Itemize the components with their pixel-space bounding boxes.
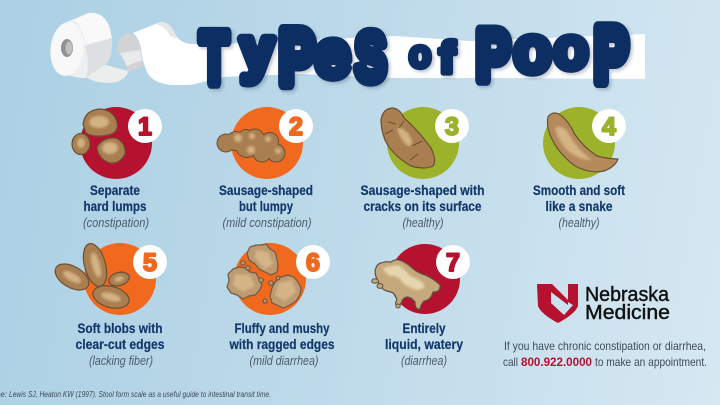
call to action text: 800.922.0000: [521, 355, 592, 369]
title: o: [514, 15, 551, 86]
title: P: [279, 15, 315, 101]
icon: toilet paper roll: [48, 13, 225, 85]
number badge 1: 1: [138, 113, 152, 141]
call to action text: call: [503, 355, 518, 369]
caption 6: (mild diarrhea): [250, 353, 318, 368]
number badge 3: 3: [445, 113, 459, 141]
caption 2: (mild constipation): [222, 215, 312, 230]
panel: type 4: [533, 107, 626, 230]
circle background 3: [387, 107, 459, 179]
caption 1: [83, 182, 149, 230]
circle background 6: [234, 243, 306, 315]
logo wordmark: Nebraska: [585, 284, 670, 306]
caption 2: but lumpy: [239, 198, 293, 214]
source footnote: Lewis SJ, Heaton KW (1997). Stool form scale as a useful guide to intestinal transit time.: [9, 390, 271, 399]
illustration: liquid splat: [372, 260, 440, 309]
caption 7: (diarrhea): [401, 353, 447, 368]
title: T: [200, 17, 228, 98]
panel: type 7: [372, 244, 470, 368]
caption 2: Sausage-shaped: [219, 182, 313, 198]
panel: type 1: [72, 107, 162, 230]
illustration: smooth snake: [547, 113, 618, 172]
caption 5: [76, 320, 165, 368]
caption 1: (constipation): [83, 215, 149, 230]
illustration: separate hard lumps: [72, 109, 125, 163]
title: S: [355, 20, 386, 96]
caption 3: [360, 182, 484, 230]
caption 1: Separate: [90, 182, 140, 198]
illustration: lumpy sausage: [216, 128, 286, 162]
panel: type 6: [227, 243, 335, 368]
illustration: cracked sausage: [381, 108, 435, 168]
circle background 2: [231, 107, 303, 179]
title: y: [241, 17, 274, 83]
panel: type 5: [51, 241, 167, 368]
number badge 6: 6: [306, 249, 320, 277]
title: o: [409, 33, 431, 75]
caption 3: Sausage-shaped with: [360, 182, 484, 198]
circle background 5: [84, 243, 156, 315]
caption 4: [533, 182, 625, 230]
title: [200, 11, 628, 101]
caption 7: Entirely: [402, 320, 446, 336]
caption 7: [385, 320, 463, 368]
caption 4: (healthy): [558, 215, 600, 230]
logo wordmark: [585, 284, 670, 324]
panel: type 2: [216, 107, 313, 230]
caption 4: Smooth and soft: [533, 182, 625, 198]
caption 3: cracks on its surface: [364, 198, 482, 214]
number badge 4: 4: [602, 113, 616, 141]
icon: N shield: [537, 284, 578, 323]
caption 7: liquid, watery: [385, 336, 463, 352]
circle background 4: [543, 107, 615, 179]
caption 2: [219, 182, 313, 230]
title: P: [594, 11, 628, 98]
logo: Nebraska Medicine: [537, 284, 670, 324]
title: e: [314, 17, 350, 91]
logo wordmark: Medicine: [585, 302, 670, 324]
caption 1: hard lumps: [84, 198, 147, 214]
title: o: [554, 17, 588, 82]
caption 3: (healthy): [402, 215, 444, 230]
panel: type 3: [360, 107, 484, 230]
number badge 2: 2: [289, 113, 303, 141]
call to action text: [503, 339, 707, 369]
title: f: [439, 33, 456, 83]
paper strip behind title: [220, 34, 645, 79]
illustration: fluffy ragged pieces: [227, 244, 301, 308]
illustration: soft blobs: [51, 241, 132, 312]
circle background 1: [80, 107, 152, 179]
caption 5: clear-cut edges: [76, 336, 165, 352]
circle background 7: [390, 244, 460, 314]
caption 5: (lacking fiber): [89, 353, 153, 368]
number badge 5: 5: [143, 249, 157, 277]
caption 6: with ragged edges: [229, 336, 335, 352]
caption 6: Fluffy and mushy: [234, 320, 330, 336]
caption 5: Soft blobs with: [78, 320, 162, 336]
number badge 7: 7: [446, 249, 460, 277]
caption 4: like a snake: [546, 198, 613, 214]
title: P: [476, 17, 510, 96]
caption 6: [229, 320, 335, 368]
